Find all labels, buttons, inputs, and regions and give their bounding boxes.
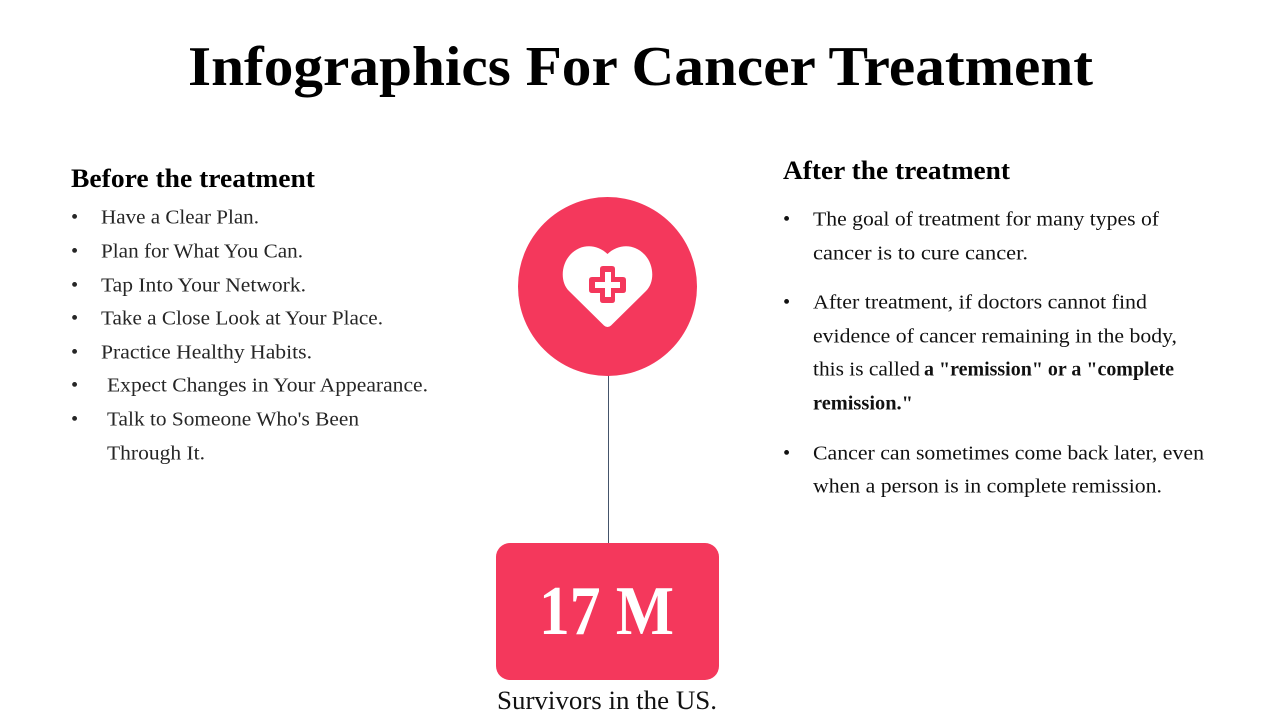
list: before the treatment: Practice Healthy Habits.: [101, 342, 312, 364]
list: before the treatment: [71, 206, 428, 464]
list: before the treatment: •: [71, 240, 78, 262]
list: after the treatment: The goal of treatment for many types of: [813, 208, 1159, 230]
list: after the treatment: cancer is to cure cancer.: [813, 242, 1028, 264]
list: after the treatment: remission.": [813, 392, 913, 414]
list: before the treatment: •: [71, 374, 78, 396]
list: after the treatment: this is called: [813, 358, 920, 380]
connector line: [608, 375, 610, 544]
list: after the treatment: Cancer can sometimes come back later, even: [813, 442, 1204, 464]
list: after the treatment: when a person is in complete remission.: [813, 476, 1162, 498]
list: after the treatment: •: [783, 208, 790, 230]
heading: after the treatment: After the treatment: [783, 156, 1010, 185]
list: before the treatment: Through It.: [107, 442, 205, 464]
list: before the treatment: •: [71, 342, 78, 364]
list: before the treatment: Take a Close Look at Your Place.: [101, 308, 383, 330]
list: before the treatment: Expect Changes in Your Appearance.: [107, 374, 428, 396]
list: after the treatment: •: [783, 292, 790, 314]
list: before the treatment: Talk to Someone Who's Been: [107, 408, 359, 430]
list: after the treatment: After treatment, if doctors cannot find: [813, 292, 1147, 314]
list: after the treatment: [783, 208, 1204, 498]
heading: before the treatment: Before the treatment: [71, 164, 315, 193]
panel: after the treatment: [783, 156, 1204, 498]
list: before the treatment: Have a Clear Plan.: [101, 206, 259, 228]
list: after the treatment: evidence of cancer remaining in the body,: [813, 326, 1177, 348]
panel: before the treatment: [71, 164, 428, 464]
list: after the treatment: a "remission" or a "complete: [924, 358, 1174, 380]
title: Infographics For Cancer Treatment: [188, 36, 1093, 98]
icon: heart with medical cross: [518, 197, 697, 376]
list: before the treatment: •: [71, 206, 78, 228]
list: before the treatment: Tap Into Your Network.: [101, 274, 306, 296]
list: after the treatment: •: [783, 442, 790, 464]
caption: survivors: Survivors in the US.: [497, 685, 717, 715]
list: before the treatment: •: [71, 308, 78, 330]
stat box: 17 M: 17 M: [539, 573, 674, 650]
stat box: 17 M: [496, 543, 719, 680]
list: before the treatment: Plan for What You Can.: [101, 240, 303, 262]
list: before the treatment: •: [71, 274, 78, 296]
list: before the treatment: •: [71, 408, 78, 430]
